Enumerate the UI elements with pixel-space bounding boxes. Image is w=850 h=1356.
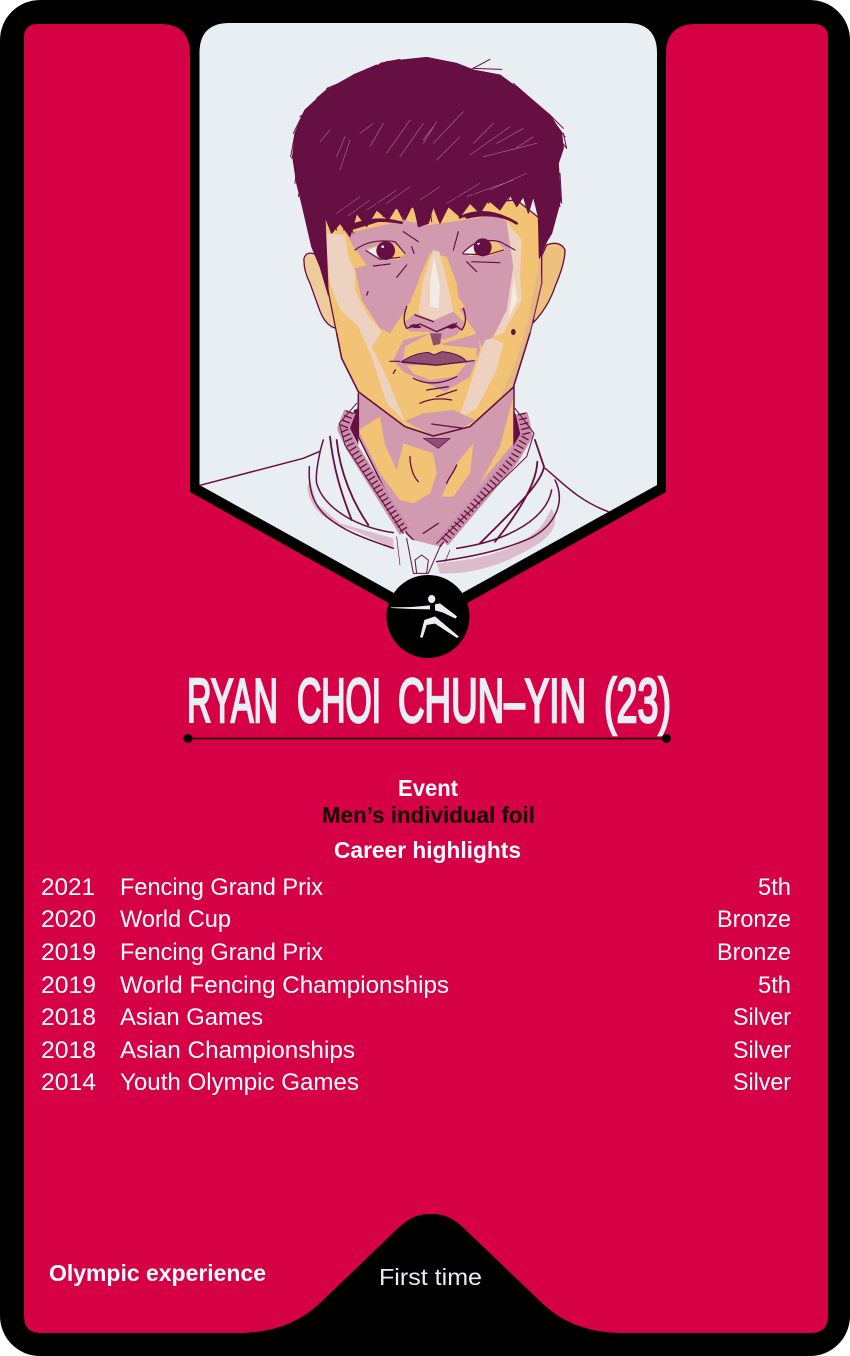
portrait: face [304, 200, 565, 436]
career highlights table: Fencing Grand Prix [120, 874, 323, 901]
career highlights table: World Cup [120, 906, 231, 933]
nose and mouth lines [367, 292, 465, 428]
title: CHOI [297, 667, 381, 736]
career highlights table: 2019 [41, 939, 96, 966]
portrait: hoodie and neck [200, 387, 608, 573]
career highlights table: 2018 [41, 1037, 96, 1064]
career highlights table: Silver [733, 1069, 791, 1096]
title [187, 667, 671, 736]
face base [323, 200, 542, 436]
title: RYAN [187, 667, 278, 736]
career highlights table: Silver [733, 1004, 791, 1031]
career highlights table: Bronze [717, 939, 791, 966]
portrait panel [200, 23, 657, 612]
career highlights table: 5th [758, 972, 791, 999]
eyes [345, 212, 517, 277]
right ear [533, 243, 565, 323]
event name: Men’s individual foil [322, 802, 535, 828]
left ear [304, 253, 337, 328]
career highlights heading: Career highlights [334, 837, 521, 863]
career highlights table: Bronze [717, 906, 791, 933]
olympic experience label: Olympic experience [49, 1260, 266, 1286]
career highlights table: Fencing Grand Prix [120, 939, 323, 966]
career highlights table: 2014 [41, 1069, 96, 1096]
career highlights table: 5th [758, 874, 791, 901]
career highlights table: 2020 [41, 906, 96, 933]
title underline [184, 734, 671, 743]
career highlights table: Youth Olympic Games [120, 1069, 359, 1096]
career highlights table [41, 874, 791, 1096]
icon: fencer medallion [386, 575, 470, 658]
career highlights table: Asian Games [120, 1004, 263, 1031]
career highlights table: 2021 [41, 874, 95, 901]
title: (23) [604, 667, 671, 736]
event heading: Event [398, 775, 458, 801]
title: CHUN–YIN [398, 667, 586, 736]
career highlights table: 2019 [41, 972, 96, 999]
career highlights table: Silver [733, 1037, 791, 1064]
portrait: hair [291, 57, 567, 295]
career highlights table: 2018 [41, 1004, 96, 1031]
olympic experience value: First time [379, 1264, 482, 1290]
career highlights table: Asian Championships [120, 1037, 355, 1064]
career highlights table: World Fencing Championships [120, 972, 449, 999]
